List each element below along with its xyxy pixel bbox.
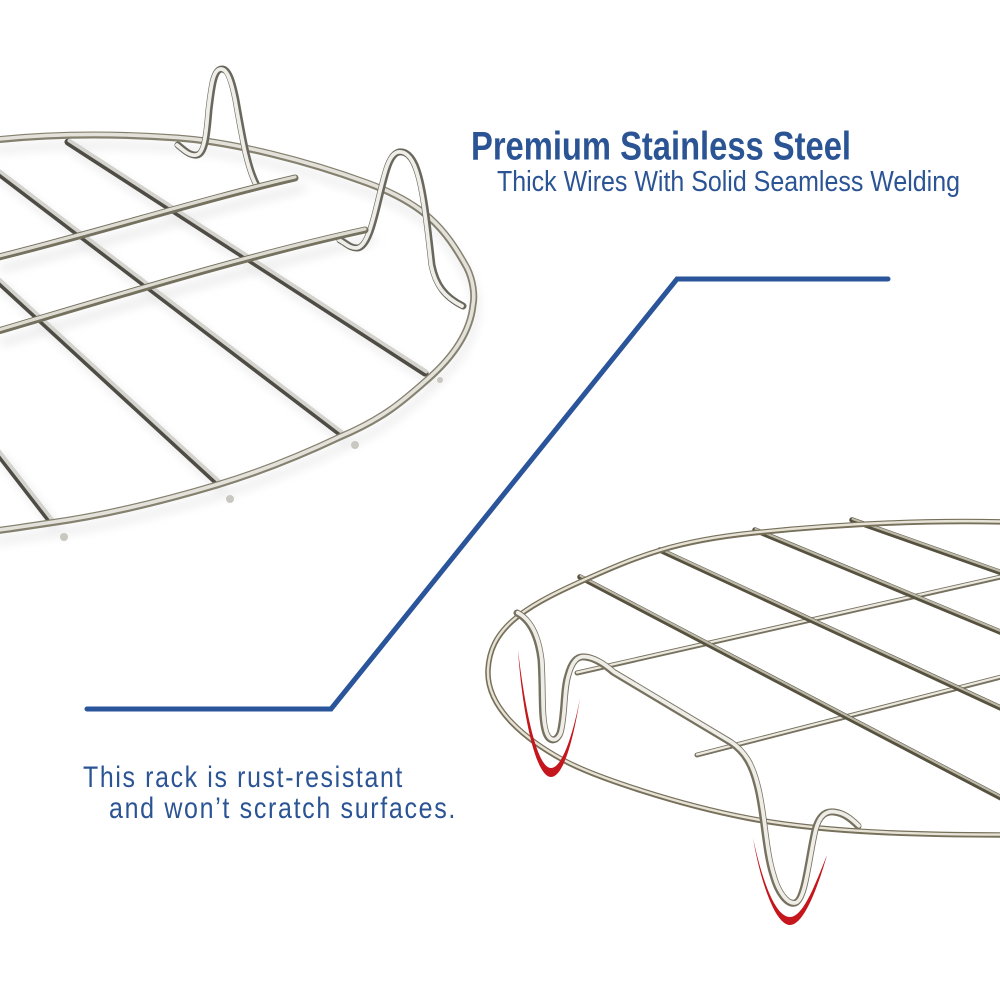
photo: top rack close-up [0, 69, 476, 541]
caption text [83, 761, 457, 825]
caption line 2: and won’t scratch surfaces. [109, 792, 457, 825]
icon: red curve, left foot [518, 650, 580, 777]
icon: red curve, right foot [753, 838, 827, 925]
heading block [471, 124, 960, 198]
photo: bottom full rack [488, 519, 1000, 903]
callout line [87, 279, 888, 709]
weld feet under the ring [60, 377, 443, 541]
caption line 1: This rack is rust-resistant [83, 761, 404, 794]
title: Premium Stainless Steel [471, 124, 851, 168]
